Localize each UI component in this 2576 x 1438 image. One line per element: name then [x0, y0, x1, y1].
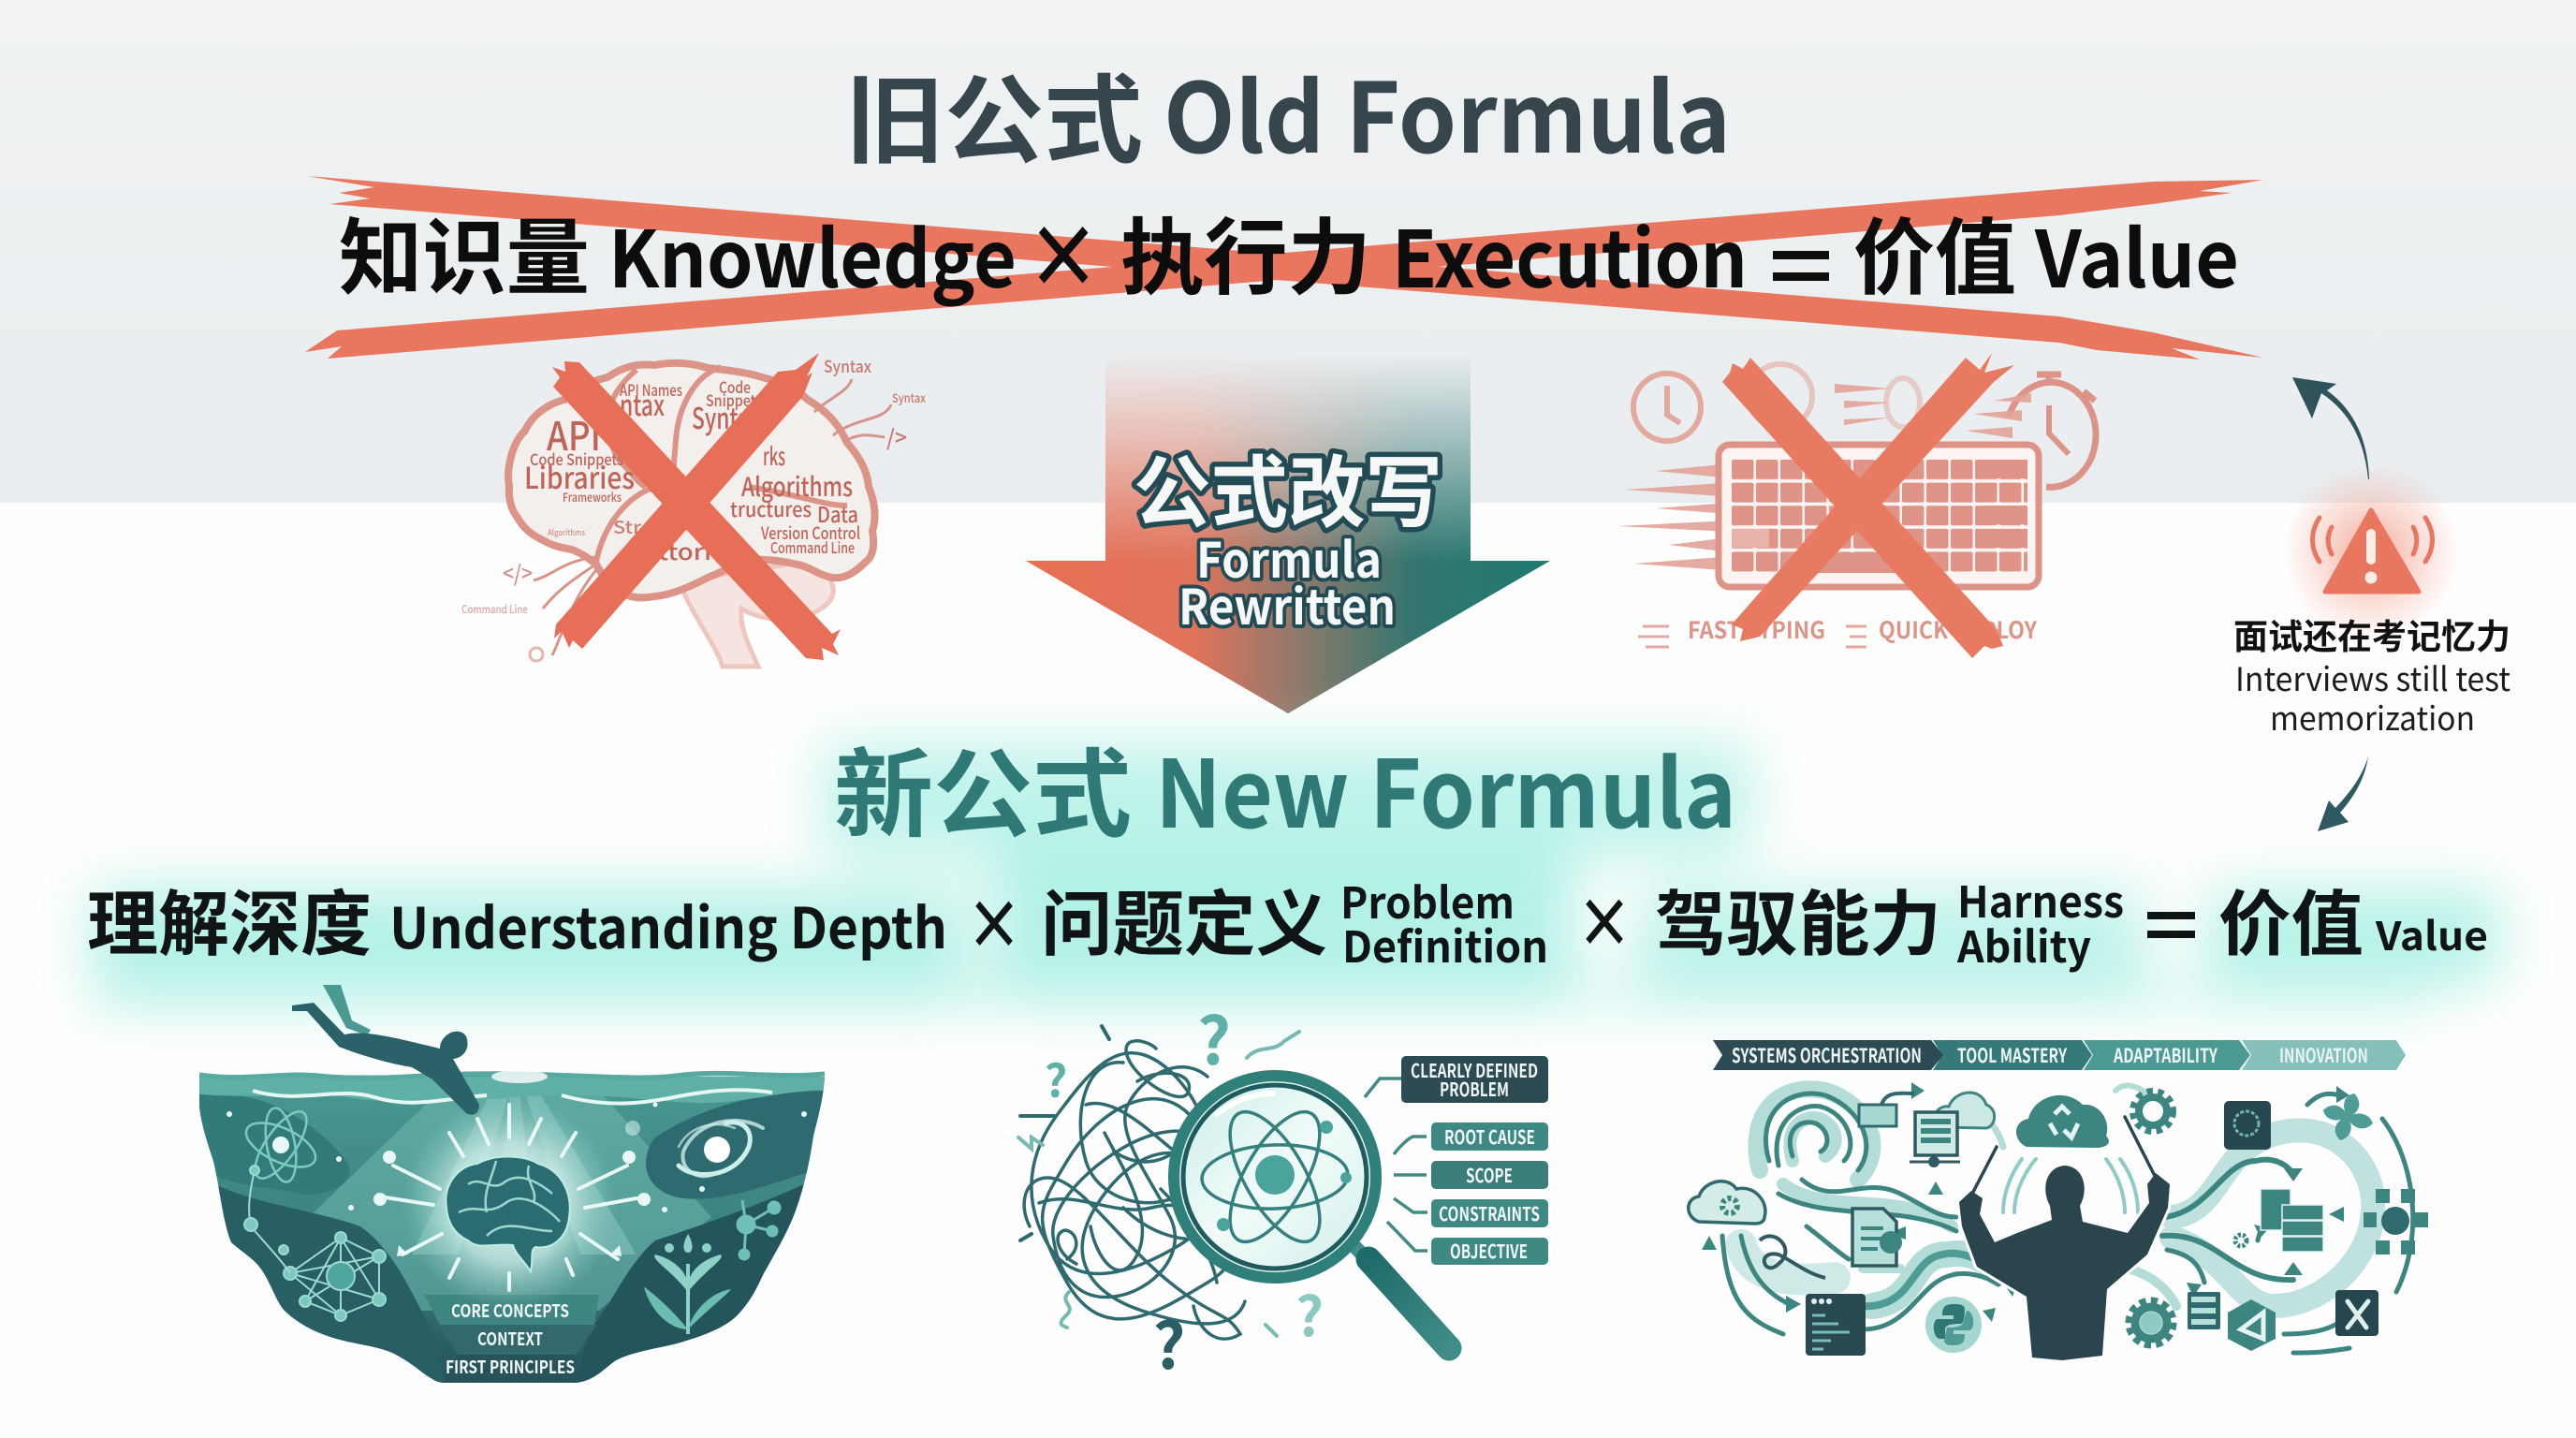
icon: warning triangle: [2282, 463, 2460, 641]
upper left dark lobe: [192, 1093, 350, 1195]
word cloud text: Code Snippets: [530, 447, 623, 470]
arrow: formula rewritten: [1026, 353, 1550, 713]
heading: new formula: New Formula: [1155, 719, 1736, 855]
label: clearly defined problem: CLEARLY DEFINED: [1411, 1056, 1538, 1083]
formula: understanding x definition x harness = value: 问题定义: [1041, 867, 1327, 970]
formula: understanding x definition x harness = value: Problem: [1340, 870, 1515, 932]
depth labels: CORE CONCEPTS: [451, 1298, 569, 1323]
arrow: formula rewritten: 公式改写: [1134, 431, 1442, 544]
icon: database tables: [2261, 1189, 2323, 1252]
illustration: understanding depth, diving into knowledge: [187, 985, 842, 1395]
central brain: [446, 1156, 570, 1271]
keyboard captions: [1638, 612, 2037, 647]
label: constraints: CONSTRAINTS: [1439, 1199, 1540, 1226]
connector lines: [1365, 1078, 1427, 1251]
illustration: problem definition magnifier: [1018, 990, 1548, 1387]
heading: new formula: [834, 717, 1736, 857]
question marks: [1045, 990, 1324, 1387]
formula: understanding x definition x harness = value: 理解深度: [87, 867, 372, 970]
formula: understanding x definition x harness = value: ×: [1576, 869, 1632, 967]
depth labels: FIRST PRINCIPLES: [446, 1354, 575, 1379]
callout text: 面试还在考记忆力: [2233, 609, 2510, 659]
flow arrowheads: [1702, 1082, 2349, 1343]
formula: knowledge x execution = value: 知识量: [339, 191, 590, 312]
word cloud text: [524, 374, 860, 566]
tangled problem scribble: [1020, 1026, 1245, 1339]
heading: old formula: [845, 41, 1731, 183]
arrow: formula rewritten: Rewritten: [1178, 568, 1396, 638]
light centre zone: [309, 1091, 711, 1311]
keyboard captions: QUICK DEPLOY: [1879, 612, 2037, 646]
red cross: [1722, 353, 2014, 658]
formula: understanding x definition x harness = value: ×: [966, 871, 1022, 969]
icon: plant: [644, 1234, 731, 1334]
depth bands: [424, 1295, 599, 1325]
formula: knowledge x execution = value: Knowledge: [608, 198, 1017, 311]
word cloud text: ntax: [620, 382, 665, 424]
heading: old formula: Old Formula: [1164, 41, 1731, 181]
formula: understanding x definition x harness = value: 价值: [2218, 867, 2364, 970]
upper right dark lobe with galaxy: [646, 1091, 833, 1199]
icon: scribble node: [1760, 1236, 1825, 1278]
formula: understanding x definition x harness = value: Value: [2375, 905, 2488, 962]
glow behind new formula: [94, 744, 2499, 1011]
callout text: memorization: [2270, 693, 2475, 741]
label: root cause: ROOT CAUSE: [1444, 1123, 1535, 1150]
light rays: [412, 1091, 637, 1255]
speed streaks: [1617, 384, 2031, 570]
question marks: ?: [1197, 990, 1231, 1084]
illustration: harness ability orchestration: [1689, 1040, 2428, 1360]
conductor silhouette: [1959, 1166, 2170, 1360]
label: scope: SCOPE: [1466, 1161, 1513, 1188]
label: scope: [1431, 1161, 1548, 1189]
word cloud text: Str: [613, 514, 641, 539]
word cloud text: rks: [763, 438, 785, 473]
word cloud text: Code: [719, 374, 751, 398]
crossed-out brush strokes over old formula: [305, 176, 2263, 360]
water body: [199, 1075, 825, 1383]
word cloud text: Frameworks: [563, 488, 622, 506]
icon: gears: [2130, 1093, 2247, 1344]
formula: knowledge x execution = value: ×: [1026, 188, 1101, 313]
formula: knowledge x execution = value: 执行力: [1120, 191, 1371, 312]
lower left dark: [218, 1185, 444, 1383]
icon: atom: [240, 1104, 322, 1186]
central glow: [402, 1095, 617, 1311]
formula: knowledge x execution = value: [339, 188, 2239, 313]
teal flow lines: [1722, 1093, 2413, 1353]
glowing connector lines: [379, 1105, 637, 1290]
icon: code window: [1806, 1294, 1866, 1356]
swimmer silhouette: [292, 985, 479, 1115]
callout text: Interviews still test: [2235, 653, 2510, 701]
question marks: ?: [1153, 1295, 1185, 1387]
brain outline: [508, 363, 875, 597]
label: clearly defined problem: [1401, 1056, 1548, 1103]
callout: interviews still test memorization: [2233, 377, 2510, 831]
word cloud text: Version Control: [760, 521, 860, 545]
word cloud text: Synta: [692, 395, 750, 437]
icon: knowledge network: [244, 1166, 386, 1321]
formula: understanding x definition x harness = value: Harness: [1957, 869, 2124, 931]
icon: top cloud: [2016, 1095, 2109, 1148]
arrow: formula rewritten: Formula: [1196, 521, 1382, 592]
icon: crossed-out knowledge brain: [461, 353, 926, 667]
icon: pinwheel: [2323, 1093, 2373, 1140]
brain folds: [596, 367, 847, 562]
icon: galaxy: [679, 1121, 763, 1176]
progress chevrons: [1713, 1040, 2406, 1070]
icon: crossed-out knowledge brain: />: [886, 419, 907, 452]
icon: crossed-out knowledge brain: Syntax: [892, 389, 926, 406]
progress chevrons: INNOVATION: [2279, 1041, 2368, 1069]
sound arcs around conductor: [2003, 1159, 2138, 1212]
word cloud text: Command Line: [770, 536, 855, 558]
progress chevrons: ADAPTABILITY: [2113, 1041, 2218, 1069]
icon: python logo: [1925, 1297, 1982, 1353]
surface: [192, 1077, 838, 1103]
progress chevrons: TOOL MASTERY: [1957, 1041, 2068, 1069]
label: objective: OBJECTIVE: [1450, 1237, 1528, 1264]
formula: understanding x definition x harness = value: 驾驭能力: [1655, 867, 1941, 970]
lower right dark: [576, 1183, 804, 1383]
batons: [1972, 1117, 2156, 1194]
word cloud text: API Names: [620, 377, 682, 401]
word cloud text: Algorithms: [741, 467, 853, 505]
arrow: up to old formula: [2292, 377, 2369, 479]
keyboard captions: FAST TYPING: [1688, 612, 1825, 646]
icon: tool tiles: [2188, 1101, 2378, 1351]
question marks: ?: [1295, 1273, 1324, 1352]
word cloud text: ttorit: [658, 534, 723, 566]
nerve lines and floating tags: [534, 379, 891, 655]
arrow: down to new formula: [2318, 756, 2368, 831]
icon: crossed-out knowledge brain: Command Line: [461, 601, 528, 617]
heading: new formula: 新公式: [834, 717, 1132, 857]
question marks: ?: [1045, 1045, 1067, 1110]
formula: knowledge x execution = value: Value: [2034, 198, 2239, 311]
word cloud text: tructures: [730, 493, 812, 523]
formula: understanding x definition x harness = value: Definition: [1342, 914, 1548, 976]
light flowing ribbons: [1741, 1086, 2373, 1306]
icon: node network: [2364, 1189, 2428, 1255]
depth labels: CONTEXT: [477, 1326, 543, 1351]
progress chevrons: SYSTEMS ORCHESTRATION: [1732, 1041, 1922, 1069]
formula: understanding x definition x harness = value: [87, 867, 2488, 976]
icon: crossed-out knowledge brain: </>: [503, 555, 533, 588]
callout text: [2233, 609, 2510, 741]
formula: understanding x definition x harness = value: Understanding Depth: [389, 884, 947, 965]
icon: molecule: [738, 1200, 780, 1259]
red cross: [552, 353, 841, 660]
keyboard: [1719, 445, 2039, 587]
magnifying glass: [1174, 1076, 1449, 1348]
icon: cloud with gear: [1689, 1181, 1765, 1224]
icon: server panels: [1859, 1093, 1995, 1167]
word cloud text: Libraries: [524, 455, 635, 498]
formula: understanding x definition x harness = value: Ability: [1956, 914, 2091, 976]
depth labels: [446, 1298, 575, 1379]
icon: crossed-out knowledge brain: Syntax: [824, 354, 871, 378]
icon: crossed-out fast typing keyboard: [1617, 353, 2096, 658]
label: clearly defined problem: PROBLEM: [1440, 1075, 1509, 1102]
clocks and stopwatch: [1633, 364, 2096, 487]
formula: knowledge x execution = value: Execution: [1392, 198, 1748, 311]
word cloud text: API: [547, 405, 601, 462]
word cloud text: Snippets: [706, 388, 762, 411]
word cloud text: Algorithms: [548, 526, 585, 538]
brain stem and cerebellum: [682, 562, 833, 667]
heading: old formula: 旧公式: [845, 43, 1143, 183]
icon: document: [1852, 1209, 1902, 1266]
water surface waves: [199, 1073, 825, 1078]
formula: knowledge x execution = value: 价值: [1853, 191, 2016, 312]
word cloud text: Data: [817, 497, 858, 529]
